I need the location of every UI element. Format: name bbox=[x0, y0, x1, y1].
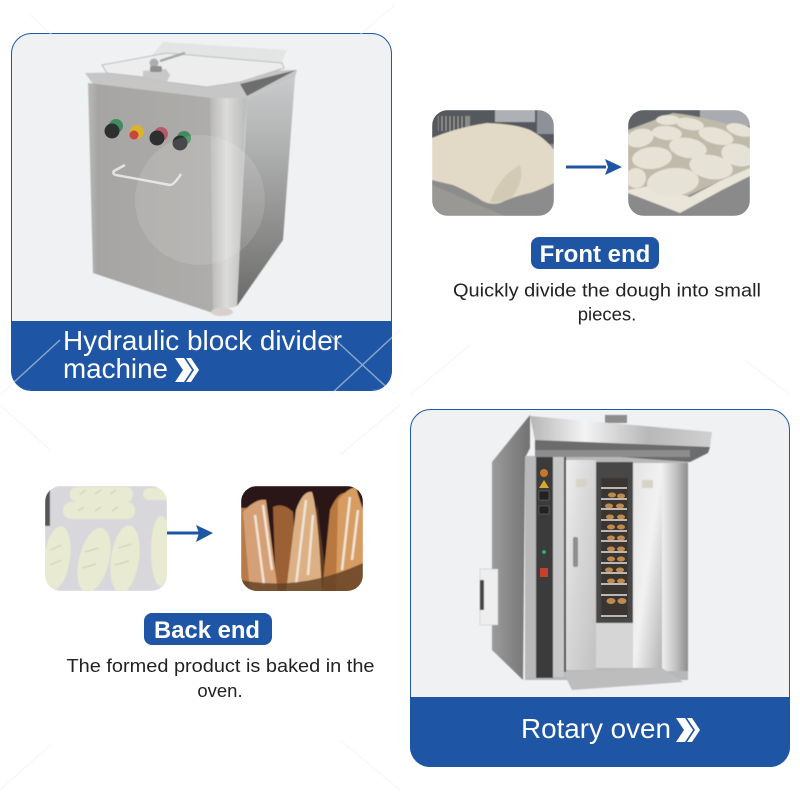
oven control panel bbox=[539, 469, 549, 577]
title text second line: machine bbox=[63, 353, 168, 384]
heading: back end: Back end bbox=[154, 617, 260, 644]
heading: front end: Front end bbox=[540, 241, 650, 268]
control buttons bbox=[104, 119, 191, 150]
panel background bbox=[410, 410, 790, 766]
panel: rotary oven bbox=[410, 410, 790, 767]
door handle bbox=[113, 165, 181, 185]
title band bbox=[410, 697, 790, 767]
text: front end description: Quickly divide the dough into small bbox=[453, 280, 761, 300]
icon: double chevron bbox=[676, 718, 700, 742]
panel background bbox=[12, 34, 392, 390]
panel: hydraulic block divider machine bbox=[11, 34, 392, 390]
icon: double chevron bbox=[175, 358, 199, 382]
text: back end description: oven. bbox=[197, 680, 243, 701]
title band bbox=[11, 321, 392, 390]
photo: whole dough bbox=[432, 110, 554, 216]
illustration: rotary oven bbox=[480, 415, 712, 690]
text: back end description bbox=[66, 655, 374, 701]
text: front end description bbox=[453, 280, 761, 324]
text: back end description: The formed product is baked in the bbox=[66, 655, 374, 676]
arrow: loaves to baguettes bbox=[167, 525, 213, 542]
photo: unbaked loaves bbox=[45, 486, 167, 591]
text: front end description: pieces. bbox=[578, 304, 636, 324]
oven rack with bread bbox=[601, 488, 627, 616]
photo: divided dough bbox=[624, 110, 757, 216]
arrow: dough to pieces bbox=[566, 159, 622, 175]
title text: Hydraulic block divider bbox=[63, 325, 342, 356]
title text: Rotary oven bbox=[521, 713, 671, 744]
illustration: divider machine bbox=[85, 42, 297, 316]
photo: baked baguettes bbox=[241, 486, 363, 592]
watermark circle bbox=[135, 135, 265, 265]
